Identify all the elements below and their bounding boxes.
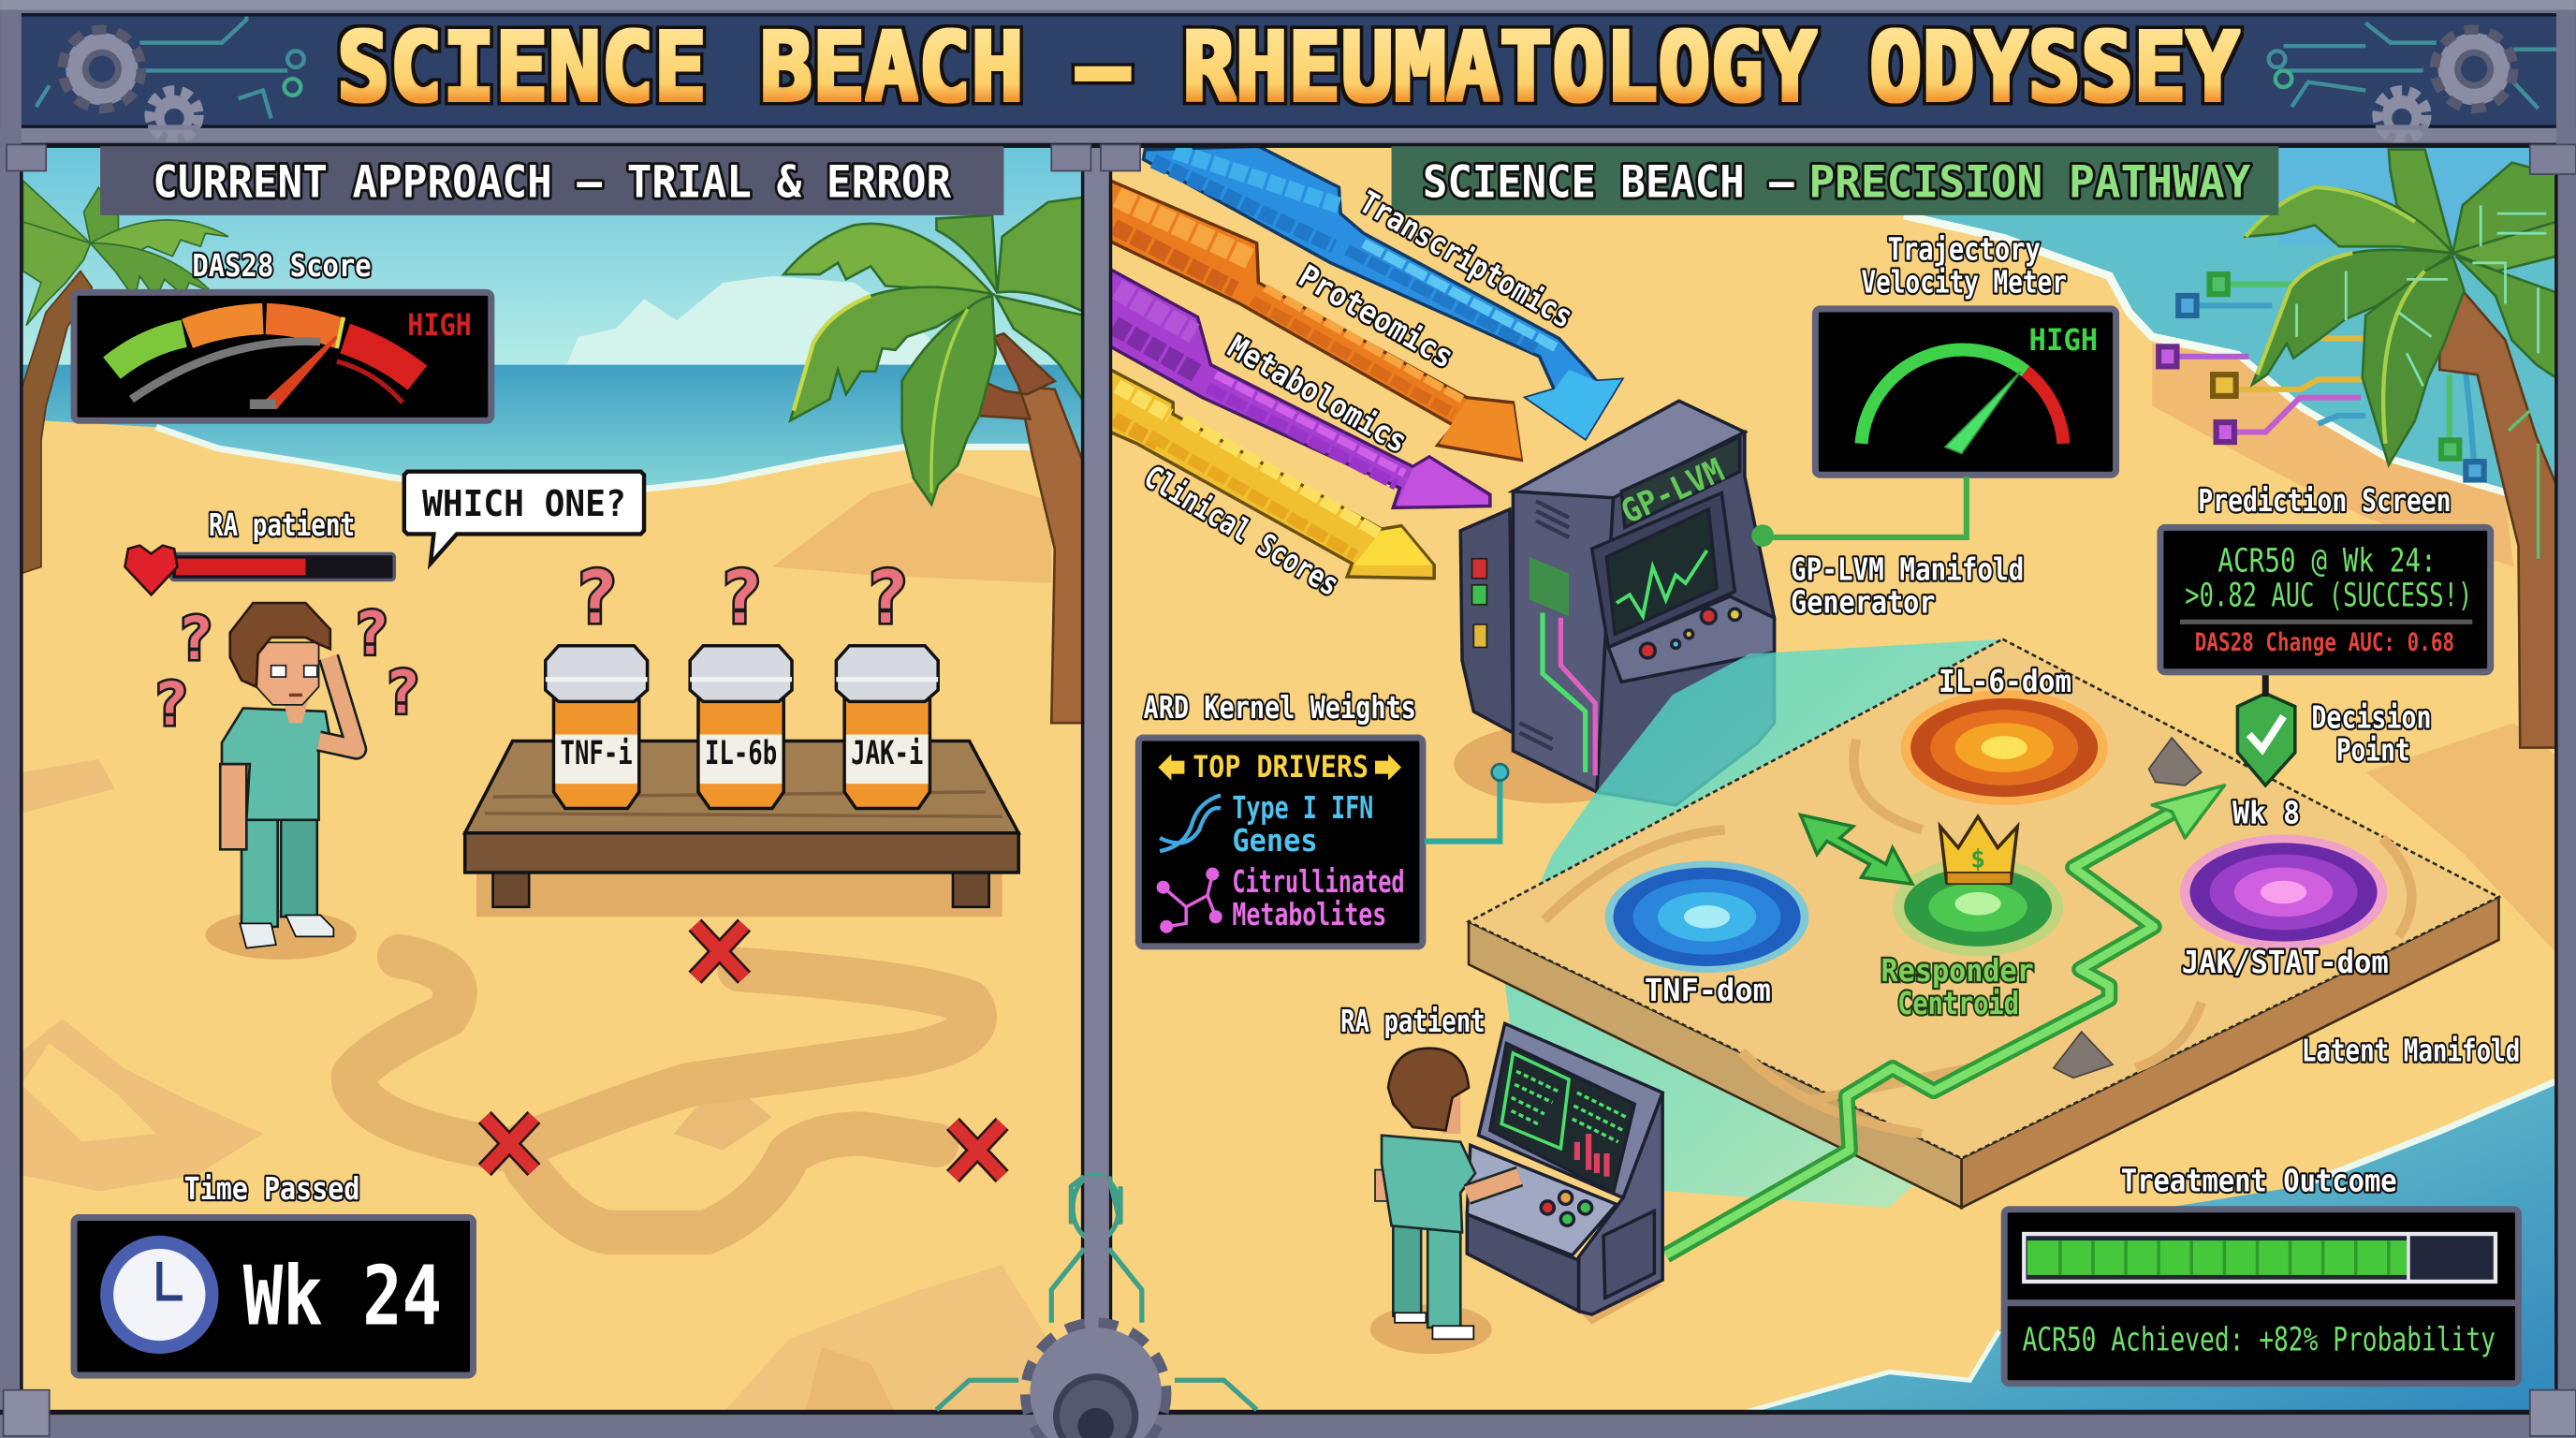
stream labels: Proteomics	[1293, 257, 1460, 375]
right palm tree	[783, 198, 1088, 723]
question marks around patient: ?	[354, 599, 389, 668]
header gear small right	[2376, 92, 2428, 138]
manifold labels: Wk 8	[2232, 794, 2300, 830]
trajectory velocity meter	[1815, 230, 2116, 475]
icon: molecule	[1158, 869, 1221, 932]
das28 label: DAS28 Score	[192, 247, 372, 284]
latent beam of light	[1505, 638, 2003, 1208]
header gear small left	[148, 92, 200, 138]
data stream: transcriptomics	[1144, 146, 1621, 439]
patient health bar: RA patient	[209, 506, 355, 543]
latent manifold platform	[1469, 639, 2498, 1208]
ard kernel weights panel: TOP DRIVERS	[1193, 751, 1368, 785]
crown icon	[1940, 816, 2017, 884]
rock near il-6	[2149, 738, 2202, 785]
treatment outcome panel: Treatment Outcome	[2121, 1162, 2397, 1198]
right panel heading: PRECISION PATHWAY	[1808, 157, 2251, 209]
sand trail	[353, 956, 974, 1232]
stream labels: Transcriptomics	[1354, 183, 1579, 335]
generator label: Generator	[1791, 584, 1935, 621]
right panel heading: SCIENCE BEACH –	[1423, 157, 1794, 209]
bottle: jak-i	[836, 646, 938, 808]
circuit palm tree	[2246, 150, 2556, 748]
question marks over bottles: ?	[866, 556, 909, 640]
icon: clock	[100, 1236, 218, 1354]
manifold labels: JAK/STAT-dom	[2182, 944, 2389, 980]
data stream: proteomics	[1110, 181, 1521, 460]
time passed panel: Wk 24	[243, 1249, 442, 1344]
confused patient	[205, 603, 357, 960]
generator label	[1791, 551, 2024, 621]
ard kernel weights panel: Genes	[1232, 822, 1318, 858]
double-headed arrow	[1801, 814, 1912, 884]
tnf dominant disc	[1605, 861, 1808, 973]
question marks around patient	[154, 599, 420, 739]
prediction screen: DAS28 Change AUC: 0.68	[2195, 629, 2454, 657]
generator label: GP-LVM Manifold	[1791, 551, 2024, 588]
manifold labels: RA patient	[1340, 1003, 1486, 1039]
trajectory velocity meter: HIGH	[2029, 324, 2098, 358]
ard kernel weights panel	[1138, 689, 1423, 946]
manifold labels: Responder	[1881, 952, 2034, 989]
progress bar	[2024, 1234, 2496, 1282]
prediction screen: >0.82 AUC (SUCCESS!)	[2185, 577, 2472, 615]
question marks around patient: ?	[154, 669, 189, 739]
patient trajectory arrow	[1666, 785, 2224, 1255]
icon: heart	[124, 546, 178, 594]
data stream: metabolomics	[1110, 270, 1490, 507]
stream labels: Clinical Scores	[1138, 458, 1345, 603]
speech bubble: WHICH ONE?	[422, 483, 626, 525]
bottle: tnf-i: TNF-i	[561, 734, 633, 772]
ard kernel weights panel: Type I IFN	[1232, 789, 1373, 826]
question marks over bottles: ?	[575, 556, 618, 640]
decision point label: Decision	[2311, 698, 2431, 735]
prediction screen: Prediction Screen	[2198, 482, 2452, 519]
header gear large right	[2438, 33, 2510, 105]
manifold labels: Latent Manifold	[2302, 1033, 2520, 1069]
manifold labels: TNF-dom	[1645, 972, 1771, 1008]
header circuit left	[37, 17, 304, 118]
bottle: il-6b: IL-6b	[705, 734, 777, 772]
central divider gear	[936, 1175, 1257, 1438]
header gear large left	[66, 33, 138, 105]
question marks over bottles	[575, 556, 909, 640]
il-6 dominant disc	[1901, 690, 2108, 805]
connector ard to manifold	[1425, 764, 1508, 842]
prediction screen: ACR50 @ Wk 24:	[2217, 542, 2437, 580]
patient health bar	[124, 506, 394, 594]
panel: science beach precision pathway	[1109, 146, 2556, 1412]
manifold labels: Centroid	[1897, 985, 2019, 1021]
treatment outcome panel	[2004, 1162, 2519, 1384]
icon: dna	[1160, 795, 1221, 851]
das28 score gauge: HIGH	[407, 309, 472, 343]
header circuit right	[2269, 23, 2556, 109]
data stream: clinical scores	[1110, 370, 1434, 579]
time passed panel: Time Passed	[184, 1170, 359, 1207]
bottle: tnf-i	[546, 646, 648, 808]
rheumatology patient at terminal	[1370, 1049, 1519, 1354]
left panel heading: CURRENT APPROACH – TRIAL & ERROR	[153, 157, 952, 209]
speech bubble	[404, 472, 644, 564]
decision point label: Point	[2336, 732, 2410, 769]
connector meter to generator	[1754, 477, 1967, 544]
left palm tree	[22, 181, 228, 574]
decision point pin	[2237, 694, 2295, 785]
crown icon: $	[1970, 846, 1985, 874]
stream labels	[1138, 183, 1579, 603]
ard kernel weights panel: Metabolites	[1232, 896, 1386, 932]
rock lower	[2054, 1032, 2113, 1078]
manifold labels	[1340, 663, 2520, 1069]
gp-lvm arcade machine: GP-LVM	[1616, 451, 1730, 532]
question marks around patient: ?	[385, 658, 420, 727]
ard kernel weights panel: ARD Kernel Weights	[1144, 689, 1416, 726]
connector line prediction to pin	[2263, 674, 2267, 697]
circuit traces from palm	[2159, 274, 2484, 479]
manifold labels: IL-6-dom	[1939, 663, 2071, 699]
decision point label	[2311, 698, 2431, 769]
question marks over bottles: ?	[719, 556, 763, 640]
left beach background	[22, 146, 1084, 1413]
right panel heading	[1392, 146, 2278, 215]
title: SCIENCE BEACH – RHEUMATOLOGY ODYSSEY	[337, 13, 2239, 124]
gp-lvm arcade machine	[1454, 401, 1774, 805]
trajectory velocity meter: Velocity Meter	[1862, 263, 2067, 300]
computer terminal	[1467, 1023, 1662, 1325]
failed attempt marks	[485, 925, 1003, 1177]
bottle: jak-i: JAK-i	[851, 734, 923, 772]
prediction screen	[2160, 482, 2491, 672]
right beach background	[1109, 146, 2556, 1412]
jak stat dominant disc	[2180, 835, 2387, 949]
panel: current approach trial and error	[22, 146, 1088, 1413]
das28 score gauge	[74, 247, 491, 420]
trajectory velocity meter: Trajectory	[1888, 230, 2041, 267]
question marks around patient: ?	[178, 604, 213, 673]
header bar	[0, 0, 2576, 144]
ard kernel weights panel: Citrullinated	[1232, 863, 1405, 900]
bottle: il-6b	[690, 646, 792, 808]
wooden table	[465, 741, 1018, 917]
responder centroid disc	[1893, 858, 2063, 956]
time passed panel	[74, 1170, 474, 1375]
stream labels: Metabolomics	[1222, 328, 1413, 460]
